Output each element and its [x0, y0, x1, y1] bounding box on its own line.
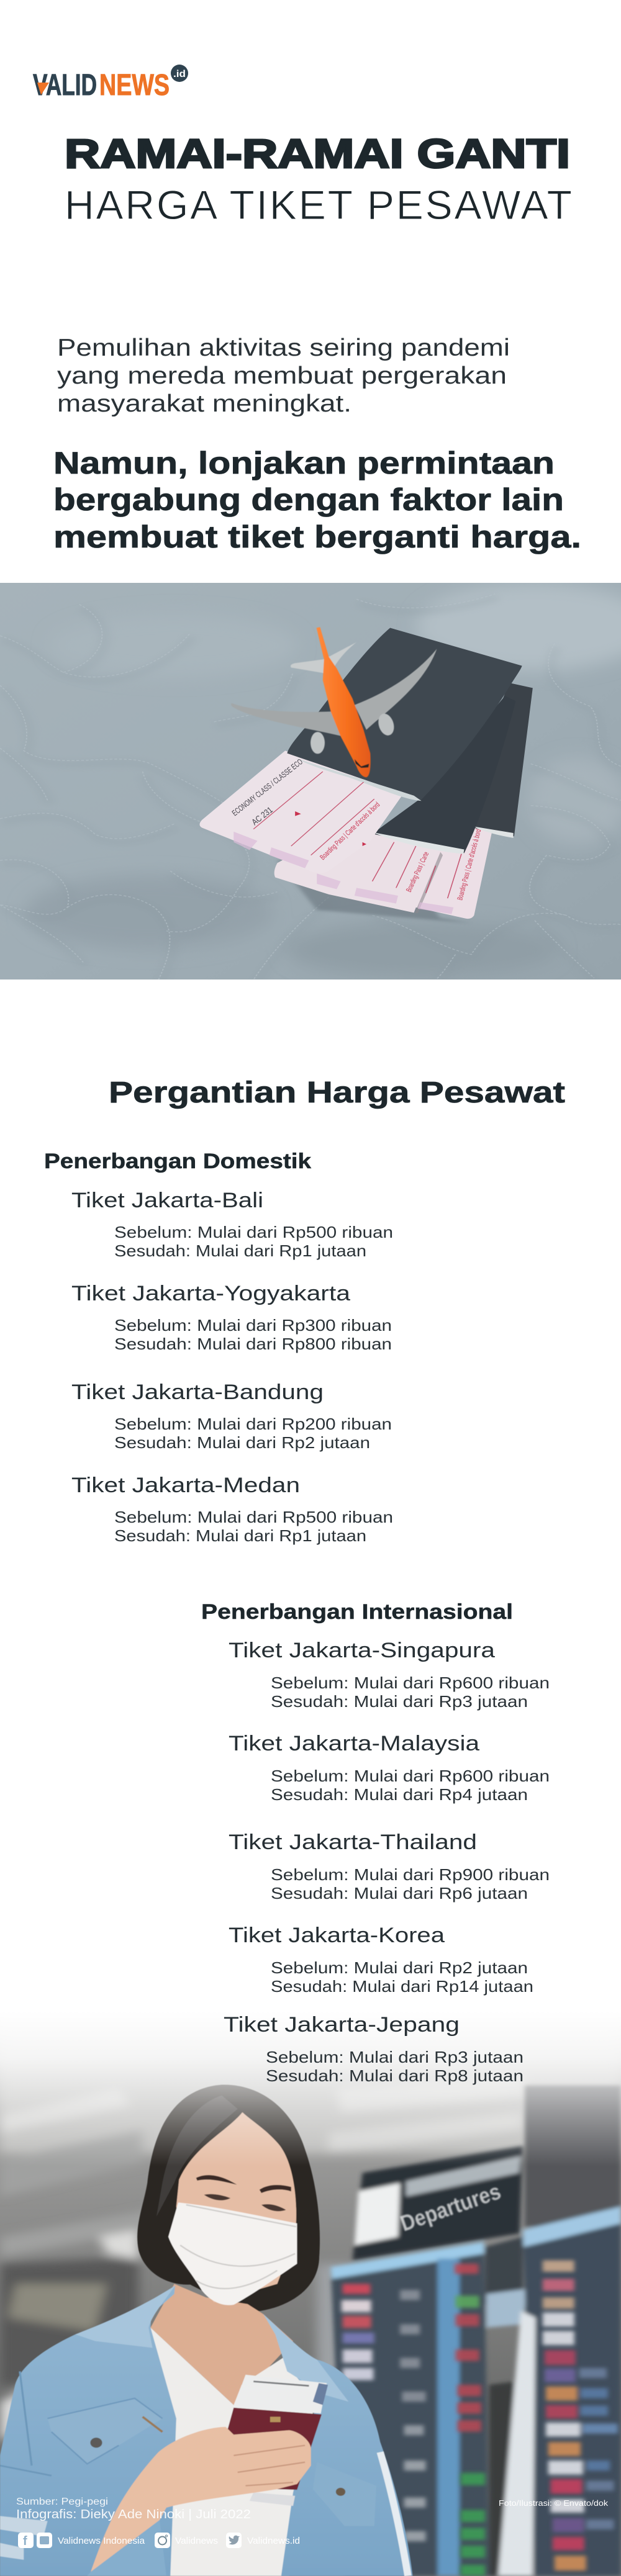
airport background: [0, 2008, 621, 2576]
denim jacket right: [263, 2314, 413, 2576]
route: Jakarta-Malaysia: Sesudah: Mulai dari Rp4 jutaan: [271, 1785, 528, 1804]
icon: facebook: [18, 2533, 34, 2548]
passports and boarding passes: [199, 627, 533, 923]
bold statement: membuat tiket berganti harga.: [53, 520, 581, 554]
label: Validnews.id: Validnews.id: [247, 2536, 300, 2546]
route: Jakarta-Yogyakarta: Sesudah: Mulai dari Rp800 ribuan: [114, 1335, 392, 1353]
route: Jakarta-Singapura: Sebelum: Mulai dari Rp600 ribuan: [271, 1673, 550, 1692]
face mask: [168, 2202, 297, 2305]
route: Jakarta-Korea: Tiket Jakarta-Korea: [229, 1924, 445, 1947]
intro paragraph: [57, 335, 510, 417]
intro paragraph: Pemulihan aktivitas seiring pandemi: [57, 335, 510, 361]
shirt: [150, 2328, 317, 2576]
route: Jakarta-Jepang: Sebelum: Mulai dari Rp3 jutaan: [266, 2048, 524, 2066]
route: Jakarta-Thailand: Sesudah: Mulai dari Rp6 jutaan: [271, 1884, 528, 1903]
denim jacket left: [0, 2286, 176, 2576]
route: Jakarta-Korea: Sebelum: Mulai dari Rp2 jutaan: [271, 1958, 528, 1977]
title: RAMAI-RAMAI GANTI: [65, 130, 570, 176]
credits: Infografis: Dieky Ade Ninoki | Juli 2022: [16, 2508, 251, 2521]
route: Jakarta-Medan: [71, 1474, 393, 1545]
intro paragraph: masyarakat meningkat.: [57, 390, 351, 417]
boarding pass text: Boarding Pass | Carte d'accès à bord: [455, 828, 483, 901]
route: Jakarta-Singapura: [229, 1639, 550, 1711]
route: Jakarta-Jepang: Tiket Jakarta-Jepang: [224, 2013, 460, 2037]
route: Jakarta-Bali: Tiket Jakarta-Bali: [71, 1189, 263, 1212]
fade to white: [0, 2011, 621, 2166]
bold statement: bergabung dengan faktor lain: [53, 482, 564, 517]
panel: domestic flights: [44, 1150, 393, 1545]
route: Jakarta-Medan: Sesudah: Mulai dari Rp1 jutaan: [114, 1526, 366, 1545]
boarding pass text: Boarding Pass | Carte: [404, 850, 430, 893]
route: Jakarta-Bandung: Sesudah: Mulai dari Rp2 jutaan: [114, 1433, 370, 1452]
route: Jakarta-Malaysia: Sebelum: Mulai dari Rp600 ribuan: [271, 1767, 550, 1785]
title: HARGA TIKET PESAWAT: [65, 182, 572, 228]
photo credit: Foto/Ilustrasi: © Envato/dok: [499, 2498, 609, 2508]
icon: twitter: [226, 2533, 242, 2548]
route: Jakarta-Bali: Sebelum: Mulai dari Rp500 ribuan: [114, 1223, 393, 1241]
icon: instagram: [155, 2533, 170, 2548]
intro paragraph: yang mereda membuat pergerakan: [57, 363, 507, 389]
route: Jakarta-Medan: Sebelum: Mulai dari Rp500 ribuan: [114, 1508, 393, 1526]
route: Jakarta-Yogyakarta: Sebelum: Mulai dari Rp300 ribuan: [114, 1316, 392, 1335]
logo: Validnews.id: .id: [173, 69, 186, 79]
bold statement: [53, 446, 581, 554]
photo: passports, boarding passes and toy plane on a quilt: [0, 583, 621, 980]
departures sign and boards: [331, 2086, 621, 2576]
heading: international: Penerbangan Internasional: [201, 1600, 513, 1624]
toy plane: [231, 627, 437, 777]
logo: Validnews.id: VALID: [33, 69, 97, 102]
route: Jakarta-Bali: [71, 1189, 393, 1260]
departures sign text: Departures: [397, 2178, 504, 2236]
route: Jakarta-Thailand: Sebelum: Mulai dari Rp900 ribuan: [271, 1865, 550, 1884]
route: Jakarta-Yogyakarta: [71, 1282, 392, 1353]
passport and boarding pass: [233, 2375, 327, 2413]
route: Jakarta-Malaysia: Tiket Jakarta-Malaysia: [229, 1732, 479, 1755]
route: Jakarta-Bandung: [71, 1380, 392, 1452]
route: Jakarta-Bandung: Sebelum: Mulai dari Rp200 ribuan: [114, 1415, 392, 1433]
route: Jakarta-Korea: Sesudah: Mulai dari Rp14 jutaan: [271, 1977, 533, 1996]
route: Jakarta-Jepang: Sesudah: Mulai dari Rp8 jutaan: [266, 2066, 524, 2085]
hair: [137, 2084, 320, 2312]
quilt shading: [2, 598, 621, 983]
woman: [0, 2084, 413, 2576]
route: Jakarta-Bandung: Tiket Jakarta-Bandung: [71, 1380, 324, 1404]
heading: domestic: Penerbangan Domestik: [44, 1150, 311, 1173]
quilt stitching: [0, 594, 621, 980]
label: Validnews Indonesia: Validnews Indonesia: [58, 2536, 145, 2546]
title: [65, 130, 572, 228]
route: Jakarta-Korea: [229, 1924, 533, 1996]
social links: [18, 2533, 300, 2548]
logo: Validnews.id: NEWS: [99, 69, 170, 102]
jacket sleeve cuff: [88, 2542, 166, 2576]
credits: Sumber: Pegi-pegi: [16, 2497, 108, 2507]
logo: Validnews.id: [33, 65, 188, 102]
neck and chest: [150, 2284, 293, 2405]
icon: facebook: f: [23, 2534, 27, 2548]
bold statement: Namun, lonjakan permintaan: [53, 446, 555, 480]
route: Jakarta-Singapura: Tiket Jakarta-Singapura: [229, 1639, 495, 1662]
icon: youtube: [37, 2533, 52, 2548]
label: Validnews: Validnews: [175, 2536, 218, 2546]
route: Jakarta-Yogyakarta: Tiket Jakarta-Yogyakarta: [71, 1282, 350, 1305]
route: Jakarta-Thailand: [229, 1831, 550, 1903]
boarding pass text: AC 231: [250, 804, 274, 827]
arm and hand: [91, 2427, 311, 2572]
route: Jakarta-Malaysia: [229, 1732, 550, 1804]
route: Jakarta-Singapura: Sesudah: Mulai dari Rp3 jutaan: [271, 1692, 528, 1711]
route: Jakarta-Thailand: Tiket Jakarta-Thailand: [229, 1831, 477, 1854]
boarding pass text: Boarding Pass | Carte d'accès à bord: [318, 800, 381, 862]
quilt folds: [25, 583, 621, 978]
photo: masked traveller at airport departures board: [0, 2008, 621, 2576]
route: Jakarta-Bali: Sesudah: Mulai dari Rp1 jutaan: [114, 1241, 366, 1260]
flight board rows: [342, 2260, 618, 2576]
face: [176, 2112, 296, 2302]
panel: international flights: [201, 1600, 550, 2085]
credits: [16, 2497, 251, 2521]
boarding pass text: ECONOMY CLASS / CLASSE ECO: [230, 757, 304, 817]
section heading: Pergantian Harga Pesawat: [109, 1076, 565, 1109]
boarding pass text: [230, 757, 483, 901]
route: Jakarta-Medan: Tiket Jakarta-Medan: [71, 1474, 300, 1497]
route: Jakarta-Jepang: [224, 2013, 524, 2085]
